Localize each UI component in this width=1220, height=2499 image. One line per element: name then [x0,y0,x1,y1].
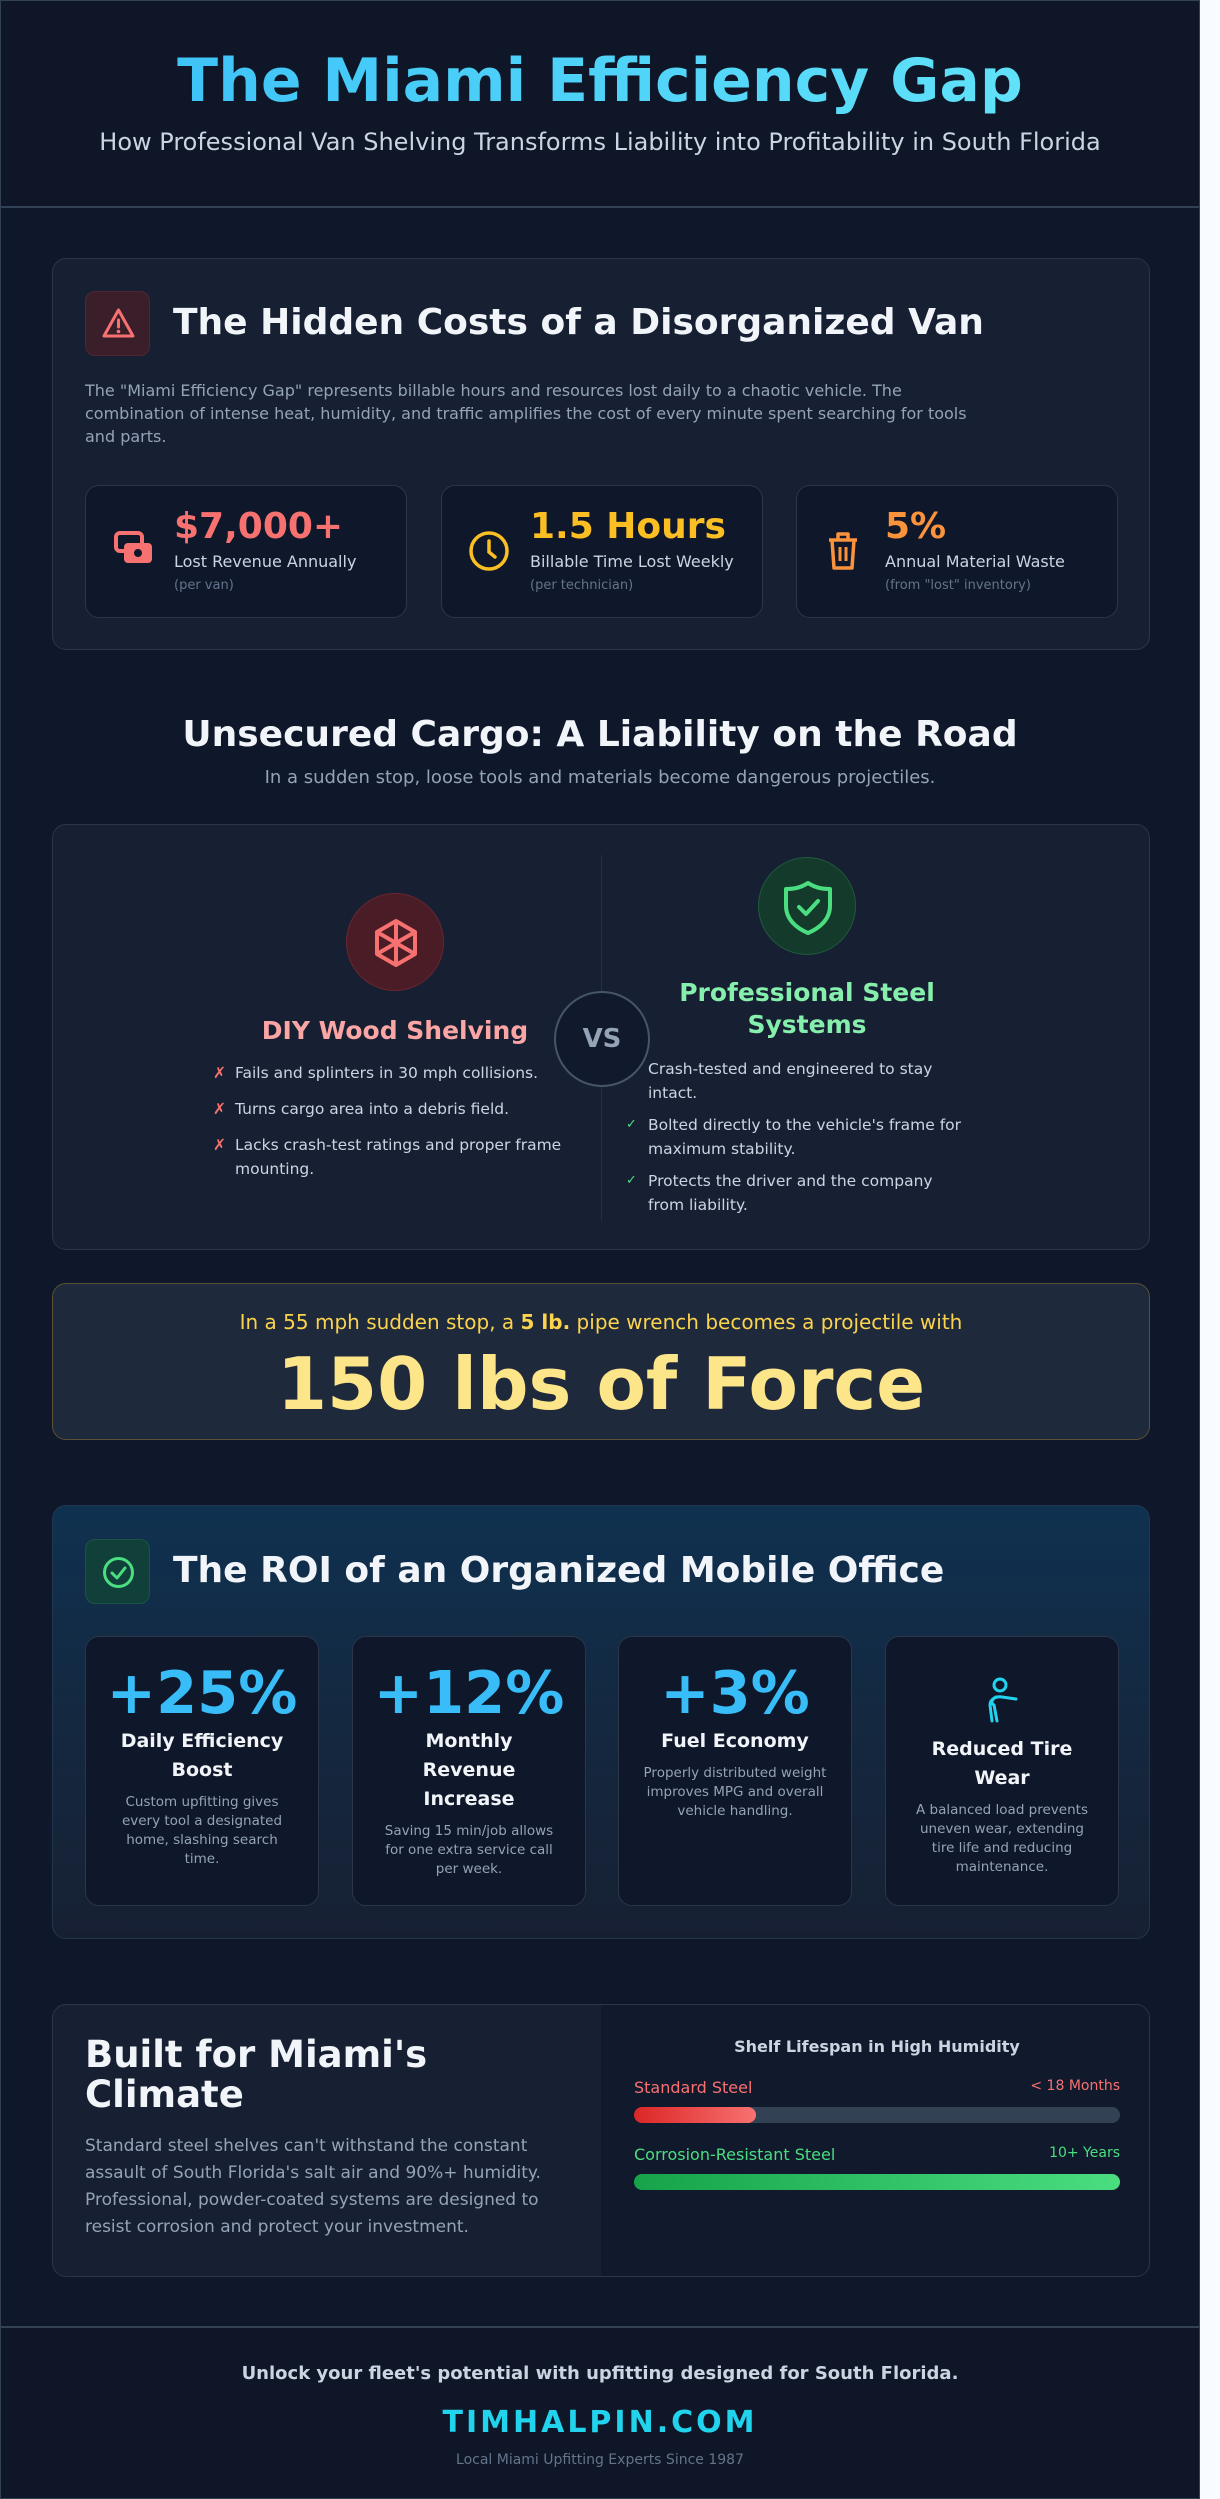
stat: fuel: Fuel Economy [661,1730,809,1752]
stat: fuel [618,1636,852,1906]
stat: efficiency: +25% [107,1658,297,1727]
callout: force [52,1283,1150,1440]
icon: shield [758,857,856,955]
text block: The "Miami Efficiency Gap" represents billable hours and resources lost daily to a chaotic vehicle. The combination of intense heat, humidity, and traffic amplifies the cost of every minute spent searching for tools and parts. [85,381,967,446]
heading: Built for Miami's Climate [85,2033,427,2116]
list: steel pros: Bolted directly to the vehicle's frame for maximum stability. [648,1116,961,1158]
icon: wood box [346,893,444,991]
stat: waste: 5% [885,506,946,547]
icon: clock [469,531,509,571]
list: DIY cons [213,1064,561,1178]
stat: revenue [352,1636,586,1906]
chart: lifespan bars: Corrosion-Resistant Steel [634,2145,835,2164]
list: steel pros: ✓ [626,1117,637,1132]
stat: waste: Annual Material Waste [885,552,1065,571]
stat: hours: (per technician) [530,578,633,593]
subtitle: How Professional Van Shelving Transforms Liability into Profitability in South Florida [99,128,1101,156]
chart: lifespan bars: 10+ Years [1049,2145,1120,2161]
tagline: Unlock your fleet's potential with upfitting designed for South Florida. [242,2363,958,2384]
text block: Standard steel shelves can't withstand the constant assault of South Florida's salt air and 90%+ humidity. Professional, powder-coated systems are designed to resist corrosion and protect your investment. [85,2136,541,2237]
heading: The ROI of an Organized Mobile Office [173,1550,944,1591]
stat: hours: 1.5 Hours [530,506,726,547]
heading: unsecured cargo: Unsecured Cargo: A Liability on the Road [182,714,1018,755]
list: DIY cons: Fails and splinters in 30 mph collisions. [235,1064,538,1082]
title: The Miami Efficiency Gap [177,46,1023,116]
panel: ROI [52,1505,1150,1939]
stat: tire: A balanced load prevents uneven wear, extending tire life and reducing maintenance. [916,1802,1088,1875]
icon: money [114,531,152,563]
list: DIY cons: ✗ [213,1136,226,1154]
stat: fuel: +3% [660,1658,810,1727]
panel: hidden costs [52,258,1150,650]
chart: lifespan bars: Shelf Lifespan in High Humidity [734,2037,1020,2056]
stat: efficiency [85,1636,319,1906]
stat: revenue: +12% [374,1658,564,1727]
title: DIY: DIY Wood Shelving [262,1016,528,1045]
stat: hours: Billable Time Lost Weekly [530,552,734,571]
icon: check circle [85,1539,150,1604]
list: DIY cons: Turns cargo area into a debris field. [235,1100,509,1118]
footer [1,2326,1199,2498]
title [1,41,1199,121]
VS badge [554,991,650,1087]
stat: tire: Reduced Tire Wear [932,1738,1072,1789]
stat: tire [885,1636,1119,1906]
chart: lifespan bars [634,2037,1120,2190]
list: steel pros: Crash-tested and engineered to stay intact. [648,1060,932,1102]
stat: fuel: Properly distributed weight improves MPG and overall vehicle handling. [644,1765,826,1819]
list: steel pros [626,1060,961,1214]
panel: climate [52,2004,1150,2277]
stat: hours [441,485,763,618]
callout: force: 150 lbs of Force [277,1342,925,1426]
icon: figure [988,1678,1018,1722]
list: steel pros: Protects the driver and the company from liability. [648,1172,933,1214]
callout: force: In a 55 mph sudden stop, a 5 lb. pipe wrench becomes a projectile with [240,1310,962,1334]
stat: revenue [85,485,407,618]
since: Local Miami Upfitting Experts Since 1987 [456,2452,744,2468]
list: DIY cons: Lacks crash-test ratings and proper frame mounting. [235,1136,561,1178]
stat: efficiency: Daily Efficiency Boost [121,1730,283,1781]
stat: revenue: Saving 15 min/job allows for one extra service call per week. [385,1823,553,1877]
stat: revenue: Lost Revenue Annually [174,552,356,571]
heading: The Hidden Costs of a Disorganized Van [173,302,984,343]
chart: lifespan bars: Standard Steel [634,2078,752,2097]
subheading: In a sudden stop, loose tools and materials become dangerous projectiles. [265,767,935,788]
header [1,1,1199,208]
list: steel pros: ✓ [626,1173,637,1188]
VS badge: VS [583,1024,621,1054]
stat: efficiency: Custom upfitting gives every tool a designated home, slashing search time. [122,1794,282,1867]
stat: revenue: (per van) [174,578,234,593]
stat: waste: (from "lost" inventory) [885,578,1031,593]
list: DIY cons: ✗ [213,1100,226,1118]
stat: revenue: Monthly Revenue Increase [423,1730,515,1810]
icon: trash [829,532,857,570]
panel: comparison [52,824,1150,1250]
icon: warning [85,291,150,356]
title: steel: Professional Steel Systems [679,978,935,1039]
stat: waste [796,485,1118,618]
brand: TIMHALPIN.COM [443,2405,757,2440]
chart: lifespan bars: < 18 Months [1030,2078,1120,2094]
stat: revenue: $7,000+ [174,506,343,547]
list: DIY cons: ✗ [213,1064,226,1082]
